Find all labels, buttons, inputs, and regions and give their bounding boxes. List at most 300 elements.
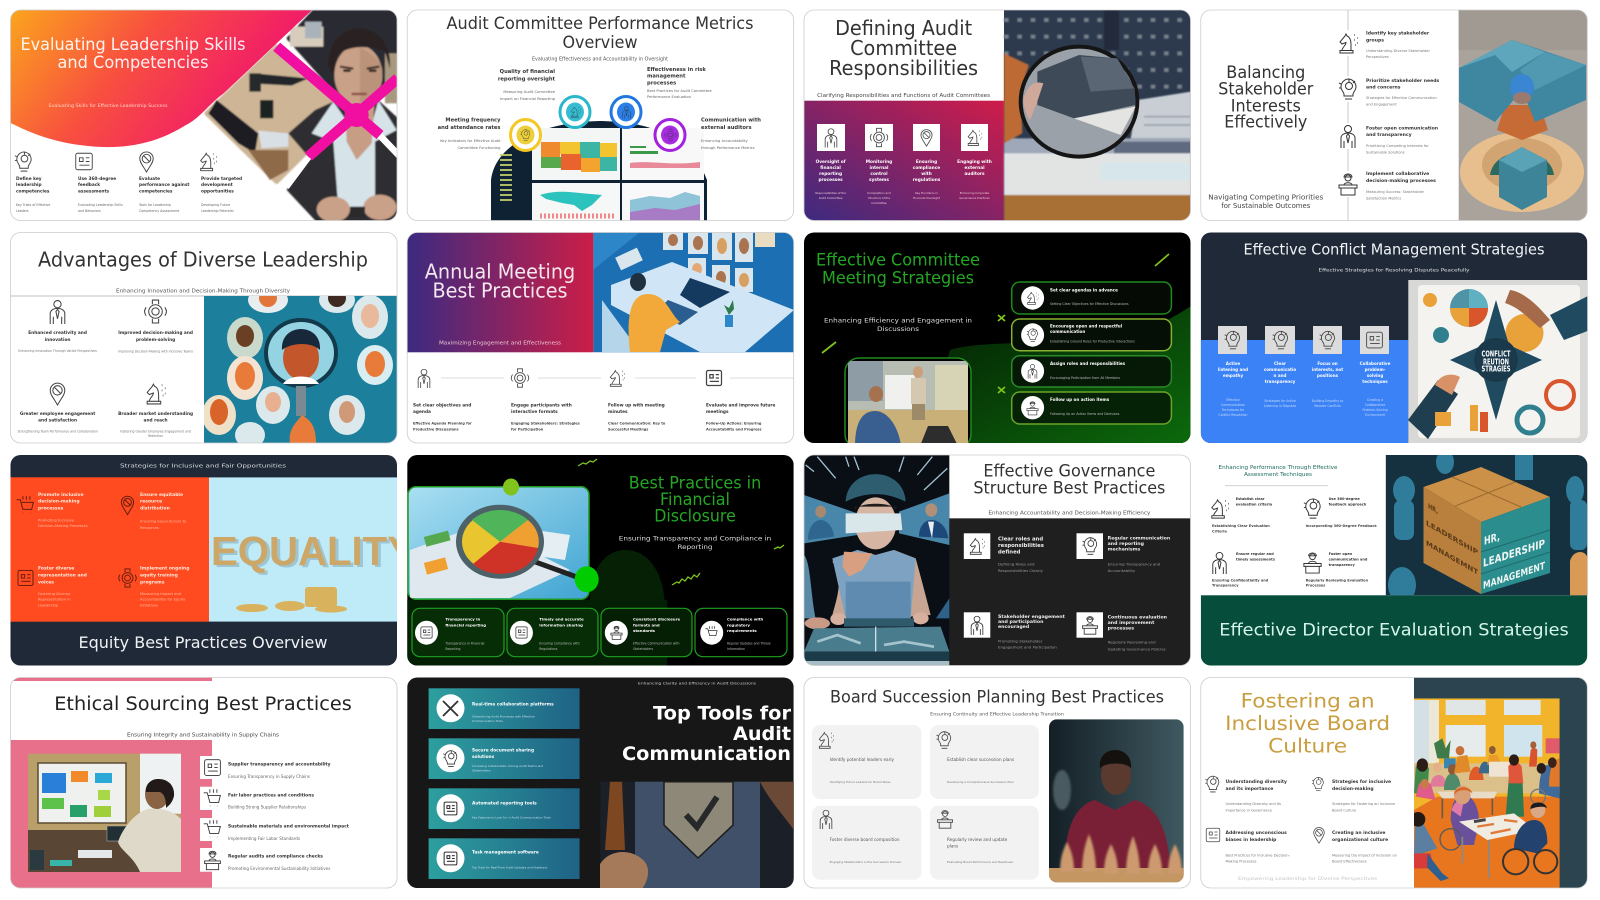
title: Effective Director Evaluation Strategies: [1219, 620, 1569, 640]
list card 2: Establishing Ground Rules for Productive Interactions: [1050, 340, 1135, 344]
item descriptions: Engaging Stakeholders: Strategies: [511, 422, 580, 426]
box 2: information sharing: [539, 622, 583, 628]
item labels: leadership: [16, 182, 42, 188]
icons: [50, 300, 166, 405]
item labels: empathy: [1223, 373, 1243, 378]
item labels: financial: [820, 165, 841, 171]
item labels: opportunities: [201, 188, 234, 194]
dark side band: [1414, 678, 1588, 888]
subtitle: Maximizing Engagement and Effectiveness: [439, 340, 562, 346]
title: [629, 473, 761, 527]
panel: Audit Committee Performance Metrics: [438, 16, 761, 220]
item descriptions: Prioritizing Competing Interests for: [1366, 144, 1429, 148]
item descriptions: Key Traits of Effective: [16, 203, 50, 207]
title: Best Practices in: [629, 473, 761, 493]
item descriptions: Strategies for Fostering an Inclusive: [1332, 802, 1395, 806]
panel: Balancing Stakeholder Interests: [1201, 10, 1588, 221]
item labels: Enhanced creativity and: [28, 330, 87, 336]
item labels: Establish clear succession plans: [947, 757, 1014, 762]
list card 4: Following Up on Action Items and Decisions: [1050, 412, 1120, 416]
item labels: [413, 402, 776, 415]
item labels: Identify potential leaders early: [830, 757, 894, 762]
item labels: positions: [1317, 373, 1339, 378]
item labels: biases in leadership: [1226, 837, 1277, 843]
illustration: conflict resolution compass: [1408, 280, 1590, 443]
item descriptions: Committee: [871, 201, 887, 205]
item labels: organizational culture: [1332, 837, 1388, 843]
box 3: standards: [633, 628, 656, 633]
item labels: Active: [1226, 361, 1240, 366]
item descriptions: Resolve Conflicts: [1314, 404, 1341, 408]
item descriptions: Updating Governance Policies: [1108, 646, 1166, 652]
item labels: Understanding diversity: [1226, 779, 1287, 785]
item descriptions: Sustainable Solutions: [1366, 150, 1405, 154]
subtitle: Enhancing Accountability and Decision-Making Efficiency: [988, 510, 1151, 516]
metric labels right: Effectiveness in risk: [647, 67, 706, 73]
photo: leadership cube: [1386, 450, 1588, 603]
list card 2: Encourage open and respectful: [1050, 324, 1123, 328]
title: [1225, 690, 1390, 758]
item labels: Fair labor practices and conditions: [228, 792, 314, 798]
item descriptions: Communication: [1221, 403, 1245, 407]
item descriptions: Effective: [1226, 398, 1240, 402]
item labels: Evaluate: [139, 176, 160, 182]
icons: [418, 369, 722, 388]
panel: Evaluating Leadership Skills: [10, 10, 402, 222]
box 2: Timely and accurate: [539, 616, 584, 622]
item descriptions: Ensuring Equal Access to: [140, 520, 187, 524]
item labels: minutes: [608, 409, 628, 415]
item descriptions: Processes: [1306, 584, 1325, 588]
illustration: conflict resolution compass: STRAGIES: [1482, 365, 1510, 374]
icon tiles: [1218, 326, 1389, 354]
item labels: Implement collaborative: [1366, 171, 1429, 177]
tool card 2: Increasing Collaboration Among Audit Teams and: [472, 764, 543, 768]
item labels: Set clear objectives and: [413, 402, 471, 408]
illustration: conflict resolution compass: REUTION: [1483, 357, 1509, 366]
item labels: internal: [869, 165, 889, 171]
item labels: with: [921, 171, 932, 177]
item descriptions: Board Culture: [1332, 808, 1356, 812]
metric labels left: and attendance rates: [438, 125, 500, 131]
item labels: Provide targeted: [201, 176, 242, 182]
item labels: solving: [1367, 373, 1383, 378]
item labels: [16, 176, 242, 194]
subtitle: [619, 536, 771, 551]
title: Audit: [733, 723, 791, 745]
list card 1: Set clear agendas in advance: [1050, 288, 1118, 292]
subtitle: for Sustainable Outcomes: [1221, 202, 1311, 210]
photo: leadership cube: MANAGEMENT: [1483, 560, 1545, 592]
footer line: Empowering Leadership for Diverse Perspectives: [1238, 876, 1378, 882]
tool card 1: Real-time collaboration platforms: [472, 701, 554, 707]
item labels: [228, 762, 349, 860]
photo: leadership cube: LEADERSHIP: [1483, 537, 1545, 570]
title: Annual Meeting: [425, 259, 575, 283]
item descriptions: Strategies for Effective Communication: [1366, 96, 1437, 100]
list card 2: communication: [1050, 329, 1085, 334]
item labels: Follow up with meeting: [608, 402, 665, 408]
item labels: [1366, 30, 1439, 184]
title: Evaluating Leadership Skills: [20, 35, 246, 54]
box 4: requirements: [727, 628, 757, 633]
item labels: feedback: [78, 182, 100, 188]
panel: Annual Meeting Best Practices: [407, 232, 794, 443]
item labels: Establish clear: [1236, 497, 1265, 501]
item labels: Continuous evaluation: [1108, 614, 1167, 620]
item labels: Engaging with: [957, 159, 992, 165]
item labels: and concerns: [1366, 84, 1401, 90]
item labels: processes: [818, 177, 843, 183]
item labels: defined: [998, 550, 1021, 556]
item labels: Engage participants with: [511, 402, 572, 408]
subtitle: Ensuring Continuity and Effective Leadership Transition: [930, 712, 1064, 716]
item labels: and transparency: [1366, 132, 1412, 138]
box 4: Compliance with: [727, 616, 764, 622]
item labels: Focus on: [1317, 361, 1338, 366]
item descriptions: Ensuring Transparency and: [1108, 562, 1161, 566]
item labels: plans: [947, 844, 958, 848]
list card 2: [1012, 319, 1171, 351]
item labels: performance against: [139, 182, 189, 188]
photo: team meeting: [845, 358, 971, 448]
item descriptions: Initiatives: [140, 604, 158, 608]
item labels: Strategies for inclusive: [1332, 779, 1391, 785]
tool card 2: [429, 738, 580, 779]
panel: Advantages of Diverse Leadership: [10, 251, 397, 443]
item labels: and satisfaction: [38, 418, 77, 424]
item descriptions: Identifying Future Leaders for Board Roles: [830, 780, 891, 784]
list card 3: Encouraging Participation from All Members: [1050, 376, 1120, 380]
item descriptions: Satisfaction Metrics: [1366, 196, 1401, 200]
item descriptions: Measuring Impact and: [140, 592, 181, 596]
panel: Defining Audit Committee Responsibilities: [804, 10, 1191, 222]
title: [424, 263, 574, 298]
metric labels right: external auditors: [701, 125, 752, 131]
box 2: Ensuring Compliance with: [539, 642, 580, 646]
title: Interests: [1231, 96, 1301, 116]
item descriptions: Retention: [148, 434, 163, 438]
metric labels left: Meeting frequency: [445, 118, 501, 124]
item labels: Foster open: [1329, 552, 1353, 556]
item labels: auditors: [964, 171, 985, 177]
box 1: Reporting: [445, 647, 460, 651]
box 1: financial reporting: [445, 622, 486, 628]
item labels: equity training: [140, 572, 178, 578]
item labels: [998, 536, 1170, 632]
item labels: regulations: [913, 177, 941, 183]
item labels: and reporting: [1108, 541, 1144, 547]
item descriptions: Evaluating Leadership Skills: [78, 203, 123, 207]
item labels: Regular communication: [1108, 536, 1170, 542]
item labels: systems: [869, 177, 889, 183]
tool card 2: Secure document sharing: [472, 747, 534, 753]
item labels: problem-: [1365, 367, 1386, 372]
title: Committee: [850, 36, 957, 60]
title: [446, 16, 753, 48]
metric labels left: reporting oversight: [498, 76, 556, 82]
panel: Equity Best Practices Overview: [10, 455, 417, 666]
title: Structure Best Practices: [973, 478, 1165, 497]
item labels: decision-making processes: [1366, 178, 1436, 184]
box 4: Regular Updates and Timely: [727, 642, 771, 646]
subtitle: [1208, 194, 1323, 208]
title: [20, 35, 246, 72]
box 3: Stakeholders: [633, 647, 654, 651]
box 3: [601, 608, 692, 657]
item descriptions: and Engagement: [1366, 102, 1397, 106]
tool card 2: solutions: [472, 754, 495, 760]
item descriptions: Ensuring Transparency in Supply Chains: [228, 774, 310, 779]
item descriptions: Listening in Disputes: [1264, 404, 1297, 408]
gradient band: [804, 101, 1004, 221]
item descriptions: Strategies for Active: [1264, 399, 1296, 403]
subtitle: Enhancing Innovation and Decision-Making Through Diversity: [116, 288, 290, 294]
box 3: formats and: [633, 622, 660, 628]
item labels: n and: [1274, 373, 1287, 378]
panel: Effective Conflict Management Strategies: [1201, 232, 1590, 443]
title: Equity Best Practices Overview: [78, 633, 328, 652]
subtitle: Effective Strategies for Resolving Disputes Peacefully: [1318, 268, 1470, 274]
title: Top Tools for: [653, 702, 792, 724]
squiggle accents: [578, 459, 784, 585]
item descriptions: Establishing Clear Evaluation: [1212, 524, 1270, 528]
metric labels right: through Performance Metrics: [701, 146, 755, 150]
item labels: Broader market understanding: [118, 411, 193, 417]
item descriptions: Leaders: [16, 209, 29, 213]
metric labels left: Quality of financial: [500, 69, 555, 75]
green background shape: [944, 306, 1191, 443]
item labels: Sustainable materials and environmental impact: [228, 824, 349, 830]
item descriptions: for Participation: [511, 428, 544, 432]
photo: woman at meeting: [207, 12, 402, 222]
title: Ethical Sourcing Best Practices: [54, 694, 352, 715]
orange content panel: [10, 477, 209, 622]
item labels: Use 360-degree: [78, 176, 116, 182]
metric labels right: management: [647, 74, 686, 80]
item labels: [1218, 361, 1391, 384]
equality image: [209, 477, 417, 622]
item descriptions: Transparency: [1212, 584, 1239, 588]
title: and Competencies: [58, 53, 208, 72]
title: Disclosure: [654, 507, 736, 527]
item labels: agenda: [413, 409, 431, 415]
item descriptions: [998, 562, 1166, 652]
item descriptions: Building Strong Supplier Relationships: [228, 804, 306, 810]
subtitle: [824, 318, 972, 333]
title: Meeting Strategies: [822, 268, 974, 287]
item labels: Greater employee engagement: [20, 411, 95, 417]
title: Audit Committee Performance Metrics: [446, 14, 754, 34]
gradient header shape: [10, 10, 312, 147]
item labels: feedback approach: [1329, 502, 1367, 506]
item labels: Evaluate and improve future: [706, 402, 776, 408]
item descriptions: Conflict Resolution: [1219, 413, 1247, 417]
item labels: problem-solving: [136, 337, 175, 343]
item descriptions: [816, 192, 990, 204]
list card 4: [1012, 392, 1171, 424]
decorative sparks: [822, 254, 1169, 393]
title: Effective Committee: [816, 251, 980, 270]
item labels: Improved decision-making and: [118, 330, 193, 336]
item descriptions: Accountability: [1108, 568, 1136, 573]
metric labels right: processes: [647, 80, 676, 86]
item labels: Creating an inclusive: [1332, 830, 1385, 836]
title: Board Succession Planning Best Practices: [830, 688, 1164, 706]
tool card 3: Key Features to Look for in Audit Communication Tools: [472, 816, 551, 820]
item descriptions: Collaborative: [1365, 403, 1385, 407]
item descriptions: Understanding Diversity and Its: [1226, 802, 1281, 806]
title: Financial: [660, 490, 730, 510]
item labels: resource: [140, 499, 162, 505]
metric labels right: Communication with: [701, 118, 761, 124]
panel: Best Practices in Financial Disclosure: [407, 455, 794, 666]
item descriptions: Responsibilities of the: [815, 191, 846, 195]
item labels: and reach: [144, 418, 168, 424]
item labels: Define key: [16, 176, 42, 182]
icons row: [15, 152, 217, 172]
item descriptions: Responsibilities Clearly: [998, 568, 1044, 573]
item labels: competencies: [16, 188, 50, 194]
item labels: reporting: [819, 171, 842, 177]
item descriptions: Clear Communication: Key to: [608, 422, 666, 426]
item descriptions: Governance Practices: [959, 196, 990, 200]
item labels: and improvement: [1108, 620, 1155, 626]
item labels: responsibilities: [998, 543, 1044, 549]
item labels: Promote inclusive: [38, 492, 84, 498]
item descriptions: Effective Agenda Planning for: [413, 422, 472, 426]
item descriptions: Key Functions in: [915, 191, 938, 195]
item labels: processes: [1108, 626, 1134, 632]
card backgrounds: [812, 725, 1039, 880]
item descriptions: Developing a Comprehensive Succession Plan: [947, 780, 1014, 784]
box 1: Transparency in: [445, 616, 481, 622]
blue band: [1201, 340, 1408, 443]
equality image: EQUALITY: [211, 528, 414, 574]
item labels: evaluation criteria: [1236, 502, 1273, 506]
item descriptions: Fostering Greater Employee Engagement and: [120, 430, 191, 434]
item descriptions: [1366, 49, 1437, 200]
item labels: processes: [38, 506, 64, 512]
title: Advantages of Diverse Leadership: [38, 248, 368, 272]
item labels: Ensure regular and: [1236, 552, 1274, 556]
item descriptions: Leadership Potential: [201, 209, 234, 213]
item descriptions: [413, 422, 762, 432]
panel: Board Succession Planning: [804, 678, 1190, 888]
item descriptions: Productive Discussions: [413, 428, 459, 432]
item labels: Regularly review and update: [947, 837, 1008, 842]
item descriptions: Enhancing Corporate: [960, 191, 990, 195]
item labels: Clear: [1274, 361, 1286, 366]
item descriptions: Board Effectiveness: [1332, 860, 1367, 864]
photo: hand holding shield: [600, 782, 795, 889]
item labels: mechanisms: [1108, 546, 1141, 552]
item descriptions: Structure of the: [868, 196, 890, 200]
item descriptions: [18, 349, 193, 438]
item descriptions: Making Processes: [1226, 860, 1257, 864]
item descriptions: Creating a: [1367, 398, 1383, 402]
box 4: regulatory: [727, 622, 751, 628]
item descriptions: Best Practices for Inclusive Decision-: [1226, 854, 1291, 858]
list card 1: Setting Clear Objectives for Effective Discussions: [1050, 302, 1129, 306]
tool card 4: Task management software: [472, 850, 539, 856]
photo: leadership cube: MANAGEMNT: [1426, 539, 1479, 577]
item labels: techniques: [1362, 379, 1388, 384]
metric labels left: Impact on Financial Reporting: [500, 97, 555, 101]
box 3: Consistent disclosure: [633, 616, 680, 622]
icons: [204, 760, 220, 870]
photo: magnifier over charts: [408, 487, 589, 599]
item descriptions: and Behaviors: [78, 209, 101, 213]
item labels: [830, 757, 1014, 848]
item labels: and its importance: [1226, 786, 1273, 792]
illustration: inclusive classroom: [1411, 698, 1560, 892]
item labels: programs: [140, 579, 165, 585]
item descriptions: Perspectives: [1366, 55, 1389, 59]
item labels: Use 360-degree: [1329, 497, 1360, 501]
subtitle: Ensuring Integrity and Sustainability in Supply Chains: [127, 732, 280, 738]
subtitle: Clarifying Responsibilities and Functions of Audit Committees: [817, 93, 990, 99]
list card 3: [1012, 356, 1171, 387]
item labels: Monitoring: [866, 159, 892, 165]
item descriptions: Leadership: [38, 604, 59, 608]
gradient header: [407, 232, 593, 352]
item labels: Addressing unconscious: [1226, 830, 1287, 836]
item labels: innovation: [45, 337, 70, 343]
dark content panel: [949, 518, 1191, 666]
item descriptions: Decision-Making Processes: [38, 524, 88, 528]
item labels: Ensuring: [916, 159, 937, 165]
tool card 3: Automated reporting tools: [472, 800, 537, 806]
list card 1: [1012, 282, 1171, 314]
title: Defining Audit: [835, 16, 972, 40]
tool card 1: Streamlining Audit Processes with Effective: [472, 714, 535, 718]
item labels: encouraged: [998, 624, 1029, 630]
item labels: and participation: [998, 619, 1043, 625]
box 4: [695, 608, 787, 657]
item descriptions: Tools for Leadership: [138, 203, 171, 207]
item descriptions: Follow-Up Actions: Ensuring: [706, 422, 762, 426]
subtitle: Discussions: [877, 326, 919, 333]
title: Fostering an: [1241, 690, 1375, 713]
item descriptions: Criteria: [1212, 529, 1227, 533]
item labels: interactive formats: [511, 409, 558, 415]
item descriptions: Ensuring Confidentiality and: [1212, 578, 1269, 582]
photo: woman with futuristic visor: [804, 455, 949, 667]
item descriptions: Importance in Governance: [1226, 808, 1272, 812]
item labels: groups: [1366, 38, 1384, 44]
item labels: representation and: [38, 572, 87, 578]
item descriptions: Understanding Diverse Stakeholder: [1366, 49, 1430, 53]
panel: Effective Director Evaluation Strategies: [1201, 450, 1588, 666]
item descriptions: Successful Meetings: [608, 428, 648, 432]
title: Responsibilities: [829, 56, 978, 80]
icons: [819, 732, 952, 829]
metric labels right: Enhancing Accountability: [701, 139, 749, 143]
title: [829, 16, 978, 80]
illustration: stacked blocks: [1459, 10, 1588, 221]
subtitle: [1218, 465, 1338, 478]
item descriptions: [1226, 802, 1397, 864]
item descriptions: Implementing Fair Labor Standards: [228, 836, 300, 841]
pink strip and panel: [10, 678, 212, 888]
ring icons: [510, 96, 686, 152]
metric labels right: Performance Evaluation: [647, 95, 692, 99]
metric labels right: [647, 67, 761, 150]
item labels: Identify key stakeholder: [1366, 30, 1430, 36]
item labels: voices: [38, 579, 54, 585]
subtitle: Assessment Techniques: [1244, 472, 1312, 478]
